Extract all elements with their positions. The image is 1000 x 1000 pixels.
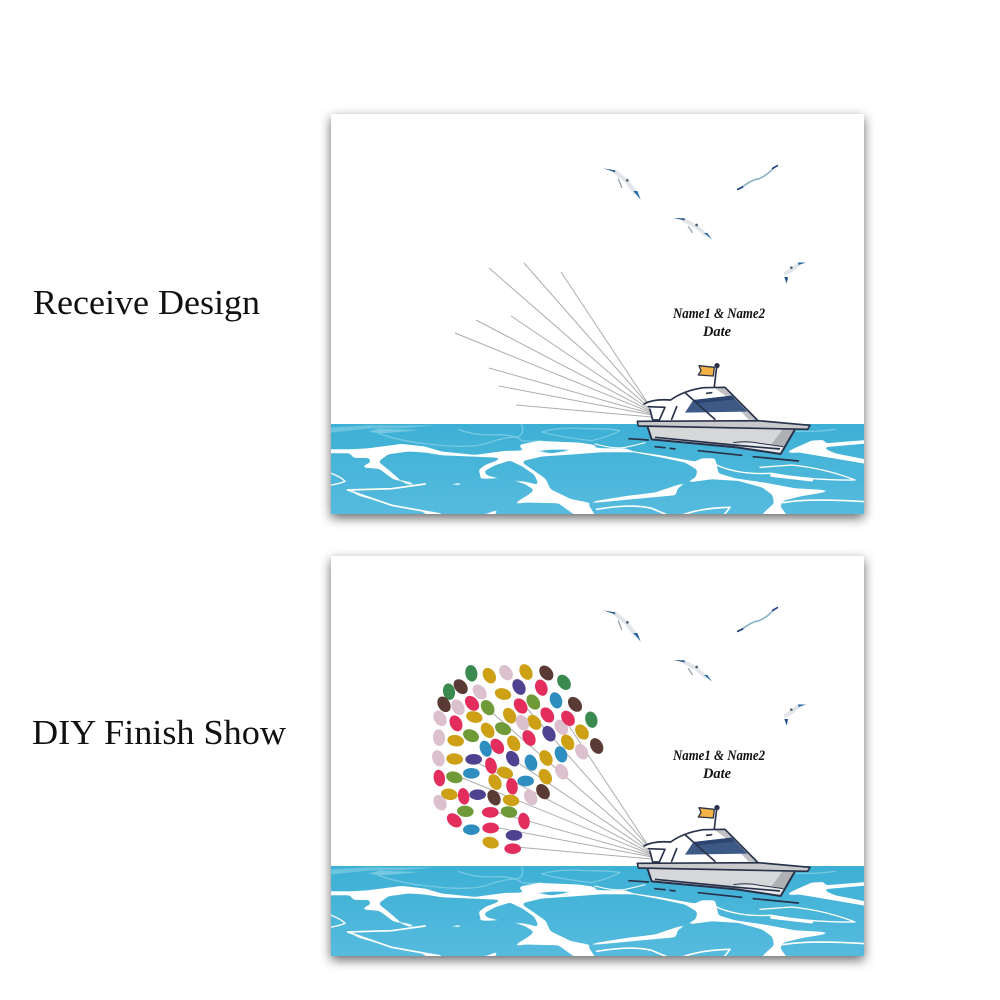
label: Receive Design: Receive Design [33,283,260,322]
text: names and date: Date [702,766,731,782]
illustration: sea [312,866,875,969]
text: names and date: Date [702,324,731,340]
illustration: balloon strings [455,705,653,859]
text: names and date [672,306,765,340]
panel: blank design card [312,114,875,527]
text: names and date: Name1 & Name2 [672,306,765,322]
label: DIY Finish Show: DIY Finish Show [32,713,287,752]
chart: fingerprint balloons [430,662,606,854]
illustration: empty balloon strings [455,263,653,417]
illustration: seagulls [603,166,806,284]
illustration: boat [629,805,810,903]
illustration: sea [312,424,875,527]
illustration: seagulls [603,608,806,726]
text: names and date [672,748,765,782]
panel: finished card [312,556,875,969]
text: names and date: Name1 & Name2 [672,748,765,764]
illustration: boat [629,363,810,461]
